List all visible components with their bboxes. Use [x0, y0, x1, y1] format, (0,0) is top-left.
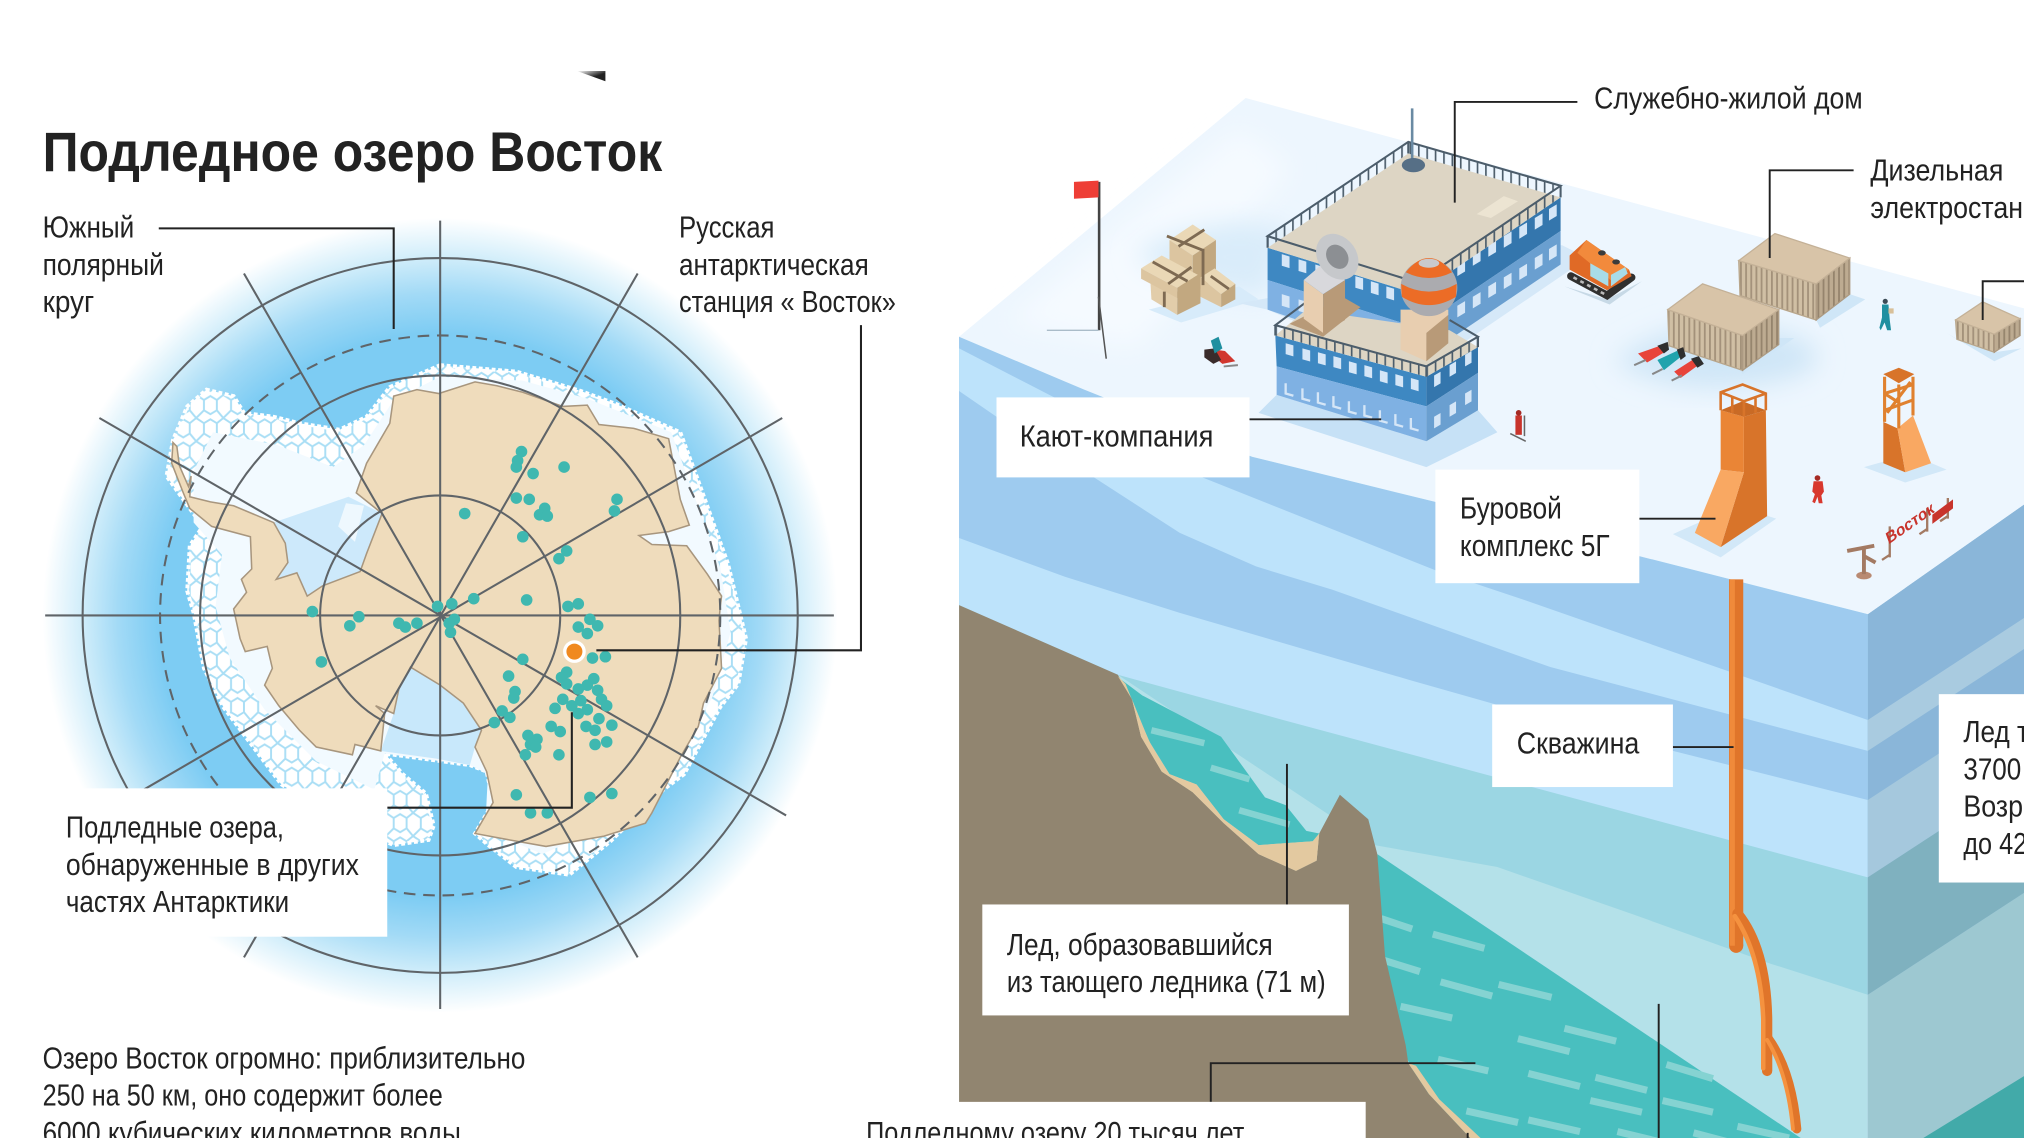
- main lake water: [1377, 854, 1801, 1138]
- callout: other subglacial lakes: [43, 788, 387, 937]
- text block: lake size: Озеро Восток огромно: приблизительно: [43, 1040, 525, 1075]
- label: Vostok station: [679, 209, 896, 319]
- diesel power station containers: [1668, 234, 1865, 374]
- mess roof: [1275, 310, 1478, 377]
- building: mess hall: [1259, 226, 1497, 467]
- satellite dish tower: [1290, 297, 1361, 337]
- front face ice strata: [959, 337, 1868, 1138]
- callout: ice thickness: [1939, 694, 2024, 883]
- callout: drilling complex: комплекс 5Г: [1460, 528, 1610, 563]
- callout: other subglacial lakes: обнаруженные в других: [66, 847, 359, 882]
- label: polar circle: Южный: [43, 209, 134, 244]
- label: diesel power station: [1870, 153, 2024, 225]
- label: diesel power station: Дизельная: [1870, 153, 2003, 188]
- polar grid: [45, 221, 834, 1009]
- roof railing: [1268, 142, 1561, 294]
- Vostok station marker: [565, 642, 584, 661]
- label: polar circle: [43, 209, 164, 319]
- all-terrain tractor: [1564, 240, 1642, 304]
- flag: [1047, 181, 1106, 359]
- signpost: [1847, 546, 1876, 579]
- label: polar circle: полярный: [43, 247, 164, 282]
- callout: melted glacier ice: Лед, образовавшийся: [1007, 927, 1273, 962]
- Vostok sign: Восток: [1884, 499, 1936, 548]
- title: Подледное озеро Восток: [43, 121, 662, 183]
- building: service and residential house: [1239, 108, 1588, 374]
- lake ripples: [1381, 919, 1789, 1138]
- callout: drilling complex: Буровой: [1460, 491, 1562, 526]
- leader lines for the map: [159, 228, 861, 808]
- label: Vostok station: Русская: [679, 209, 774, 244]
- small container: [1947, 302, 2021, 361]
- continent: [172, 382, 722, 846]
- label: Vostok station: станция « Восток»: [679, 284, 896, 319]
- decorative corner mark: [577, 71, 605, 81]
- ocean glow: [43, 218, 838, 1013]
- callout: other subglacial lakes: Подледные озера,: [66, 809, 284, 844]
- windows of the house: [1282, 204, 1557, 318]
- callout: borehole: [1492, 704, 1673, 787]
- callout: lake age: [842, 1102, 1366, 1138]
- roof: [1268, 154, 1561, 294]
- callout: other subglacial lakes: частях Антарктики: [66, 884, 289, 919]
- panel: ice block cross-section: [959, 98, 2024, 1138]
- parked snowmobiles: [1634, 342, 1704, 381]
- Ross ice shelf: [381, 667, 481, 765]
- big drilling complex: [1673, 384, 1776, 557]
- glacial melt pocket: [1118, 676, 1319, 871]
- mess railing: [1275, 325, 1478, 377]
- Vostok sign: [1882, 498, 1953, 560]
- label: residential house: Служебно-жилой дом: [1594, 80, 1863, 115]
- callout: drilling complex: [1435, 470, 1639, 583]
- borehole: [1729, 579, 1797, 1129]
- leader lines for the diagram: [1211, 102, 2024, 1138]
- callout: mess hall: Кают-компания: [1020, 418, 1213, 453]
- ice shelves: [167, 365, 746, 875]
- Ronne ice shelf: [274, 497, 382, 596]
- sand layer: [1118, 676, 1319, 871]
- panel: Antarctica map: [43, 218, 838, 1013]
- small drilling rig: [1864, 368, 1947, 483]
- label: polar circle: круг: [43, 284, 94, 319]
- callout: borehole: Скважина: [1517, 726, 1640, 761]
- snow surface: [959, 98, 2024, 614]
- snowmobile with rider: [1204, 337, 1238, 366]
- text block: lake size: [43, 1040, 525, 1138]
- callout: melted glacier ice: из тающего ледника (71 м): [1007, 964, 1326, 999]
- person with box: [1879, 299, 1894, 330]
- cargo crates: [1141, 225, 1259, 323]
- callout: mess hall: [997, 397, 1250, 477]
- bedrock: [959, 605, 1470, 1138]
- label: Vostok station: антарктическая: [679, 247, 869, 282]
- right face ice strata: [1868, 504, 2024, 1138]
- antenna: [1411, 108, 1413, 163]
- skier: [1510, 410, 1526, 441]
- radome tower: [1401, 321, 1426, 361]
- subglacial lake dots: [307, 446, 623, 819]
- text block: lake size: 250 на 50 км, оно содержит более: [43, 1078, 443, 1113]
- callout: melted glacier ice: [982, 904, 1349, 1015]
- windows of the mess hall: [1286, 343, 1472, 428]
- person in red: [1812, 475, 1824, 503]
